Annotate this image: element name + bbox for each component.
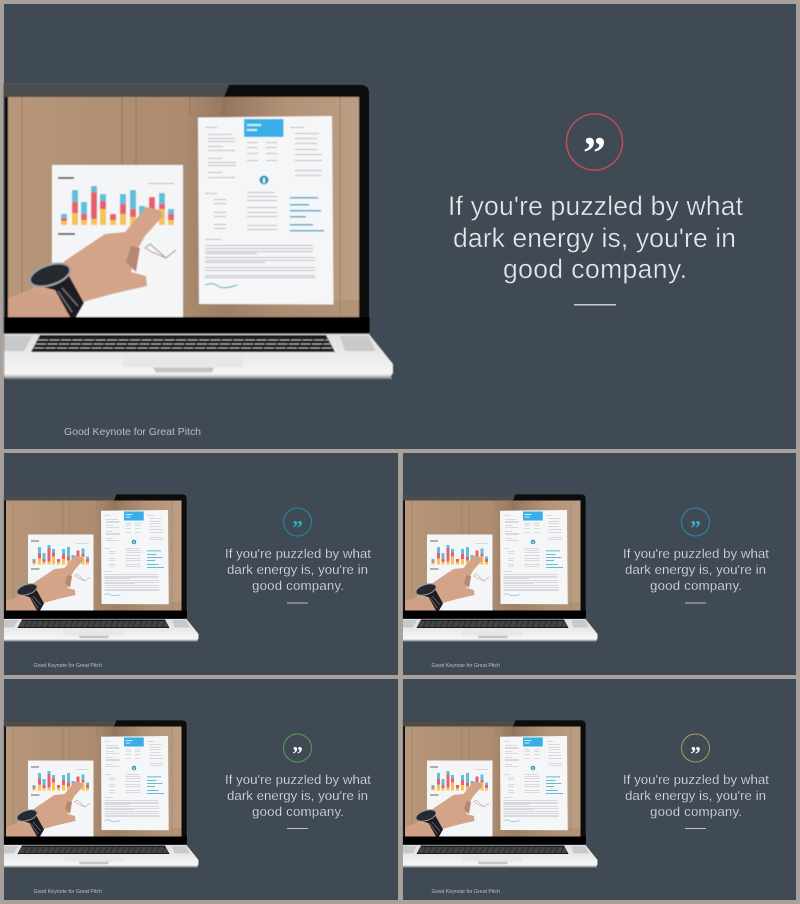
quote text: good company. [503, 254, 687, 284]
icon: red quotation circle [566, 114, 622, 178]
quote text [225, 772, 371, 819]
footer caption: Good Keynote for Great Pitch [34, 663, 102, 669]
divider line [287, 828, 308, 829]
quote text: If you're puzzled by what [225, 772, 371, 787]
quote text: good company. [650, 804, 742, 819]
icon: green quotation circle: ” [292, 742, 303, 766]
footer caption: Good Keynote for Great Pitch [432, 889, 500, 895]
panel: small slide yellow [403, 679, 796, 900]
quote text [623, 546, 769, 593]
icon: green quotation circle [284, 734, 312, 766]
laptop [4, 494, 198, 642]
footer caption: Good Keynote for Great Pitch [64, 426, 201, 438]
divider line [685, 828, 706, 829]
quote text [623, 772, 769, 819]
quote text: dark energy is, you're in [227, 788, 368, 803]
icon: red quotation circle: ” [583, 127, 606, 178]
footer caption: Good Keynote for Great Pitch [34, 889, 102, 895]
icon: blue quotation circle [682, 508, 710, 540]
laptop [4, 720, 198, 868]
laptop with charts on screen [4, 84, 393, 379]
quote text: If you're puzzled by what [448, 191, 744, 221]
icon: yellow quotation circle: ” [690, 742, 701, 766]
quote text: dark energy is, you're in [227, 562, 368, 577]
quote text: good company. [252, 578, 344, 593]
divider line [685, 602, 706, 604]
icon: teal quotation circle: ” [292, 516, 303, 540]
icon: blue quotation circle: ” [690, 516, 701, 540]
footer caption: Good Keynote for Great Pitch [432, 663, 500, 669]
quote text: dark energy is, you're in [453, 223, 736, 253]
panel: small slide teal [4, 453, 398, 675]
quote text: good company. [650, 578, 742, 593]
quote text: dark energy is, you're in [625, 788, 766, 803]
quote text: good company. [252, 804, 344, 819]
panel: small slide green [4, 679, 398, 900]
quote text: dark energy is, you're in [625, 562, 766, 577]
laptop [403, 720, 598, 868]
icon: teal quotation circle [284, 508, 312, 540]
divider line [287, 602, 308, 604]
quote text [225, 546, 371, 593]
panel: large slide [4, 4, 796, 449]
panel: small slide blue [403, 453, 796, 675]
quote text: If you're puzzled by what [225, 546, 371, 561]
laptop [403, 494, 598, 642]
quote text [448, 191, 744, 284]
icon: yellow quotation circle [682, 734, 710, 766]
divider line [574, 304, 616, 306]
quote text: If you're puzzled by what [623, 546, 769, 561]
quote text: If you're puzzled by what [623, 772, 769, 787]
